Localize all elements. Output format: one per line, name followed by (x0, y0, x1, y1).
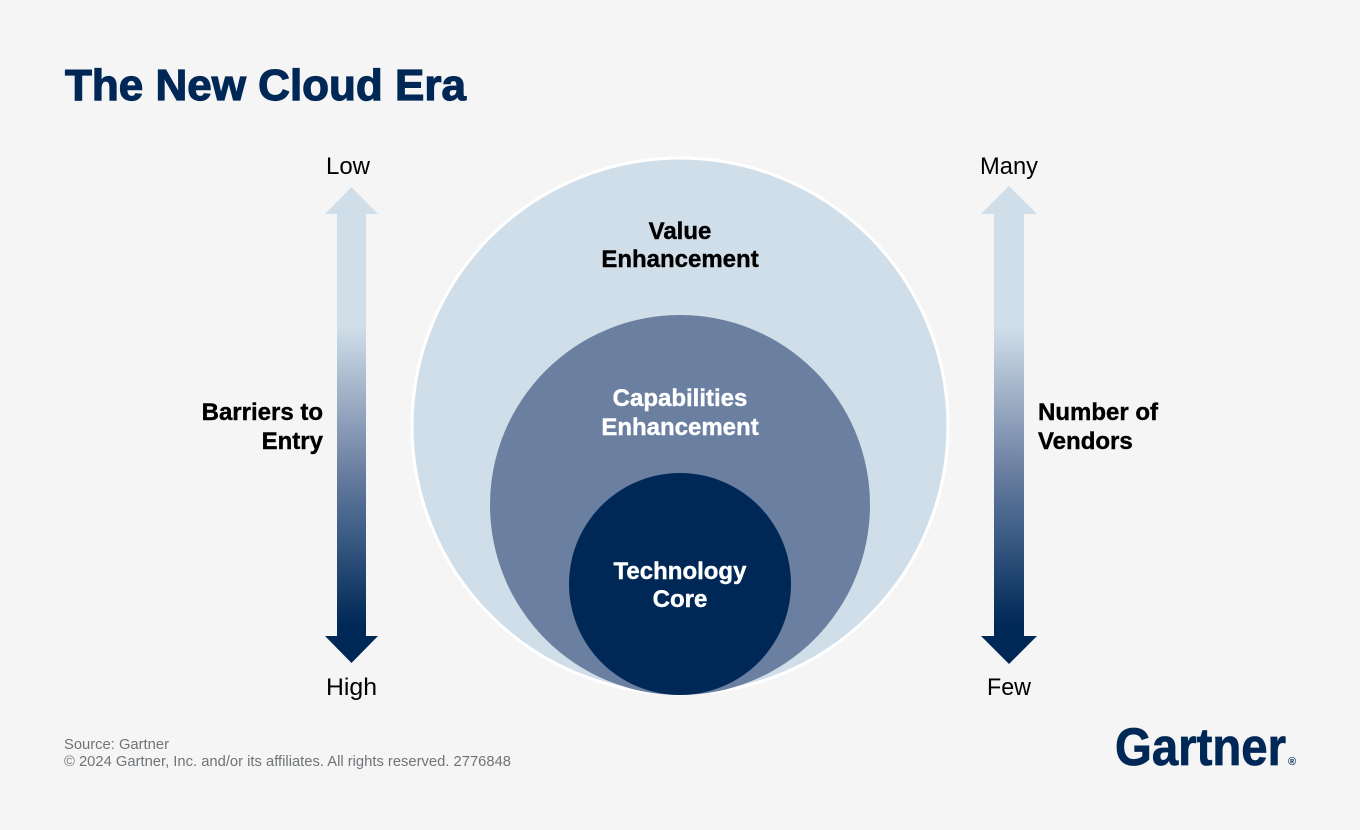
label: value enhancement: Value (649, 218, 711, 245)
nested circles diagram (412, 158, 948, 695)
circle: value enhancement (412, 158, 948, 694)
circle: technology core (569, 473, 791, 695)
logo wordmark: Gartner (1115, 718, 1286, 777)
arrow: number of vendors (981, 186, 1037, 664)
source note: Source: Gartner (64, 737, 169, 753)
label: technology core: Technology (614, 558, 747, 585)
label: capabilities enhancement: Capabilities (613, 385, 747, 412)
label: number of vendors: Vendors (1038, 428, 1133, 455)
label: low: Low (326, 153, 371, 180)
label: number of vendors: Number of (1038, 399, 1159, 426)
logo registered mark: ® (1288, 756, 1296, 768)
label: capabilities enhancement: Enhancement (601, 414, 759, 441)
label: barriers to entry: Entry (262, 428, 324, 455)
left scale: barriers to entry (202, 153, 378, 701)
label: many: Many (980, 153, 1038, 180)
circle: capabilities enhancement (490, 315, 870, 695)
label: high: High (326, 674, 377, 701)
arrow: barriers to entry (325, 187, 378, 663)
label: few: Few (987, 674, 1032, 701)
source note: © 2024 Gartner, Inc. and/or its affiliates. All rights reserved. 2776848 (64, 754, 511, 770)
title: The New Cloud Era (65, 61, 467, 110)
logo: Gartner (1115, 718, 1296, 777)
label: value enhancement: Enhancement (601, 246, 759, 273)
label: barriers to entry: Barriers to (202, 399, 323, 426)
right scale: number of vendors (980, 153, 1159, 701)
label: technology core: Core (653, 586, 707, 613)
